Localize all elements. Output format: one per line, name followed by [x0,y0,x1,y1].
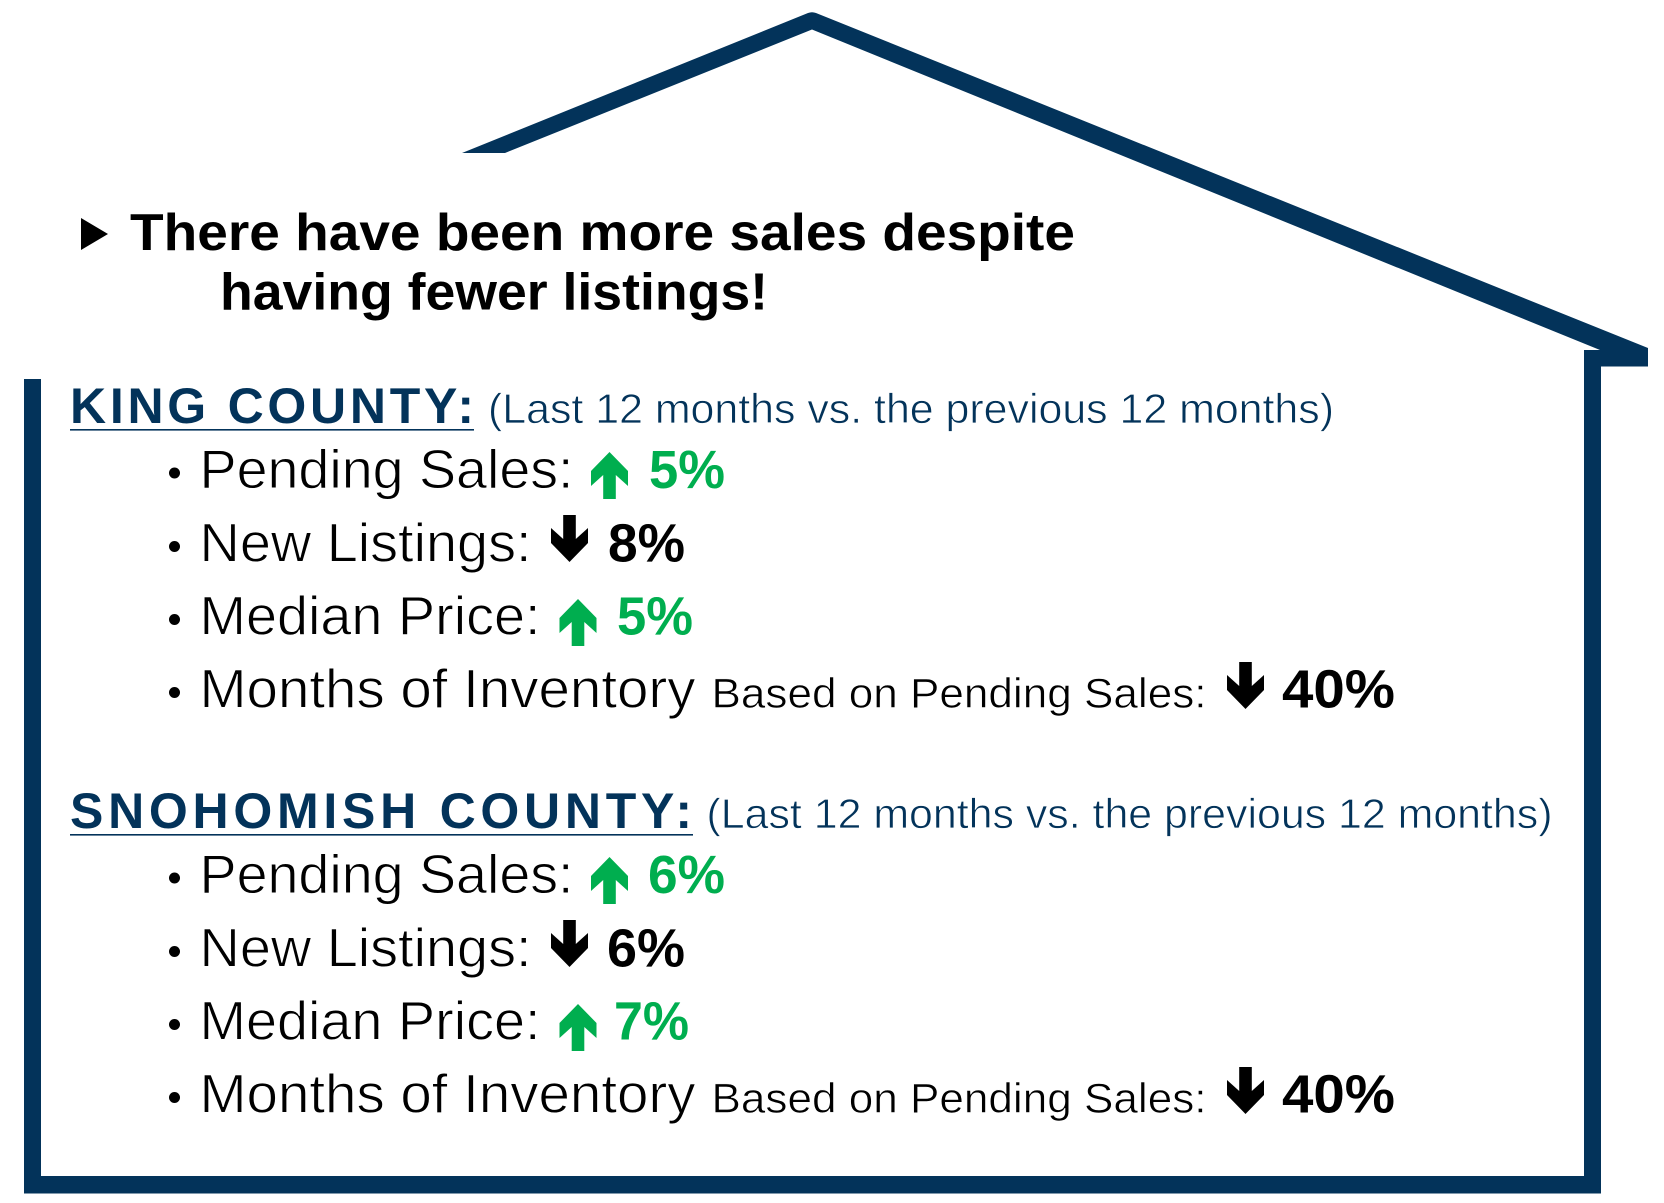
headline text: There have been more sales despite [130,204,1075,262]
icon: triangle bullet [81,218,108,250]
row: new listings: New Listings: [200,916,532,978]
King County period note: (Last 12 months vs. the previous 12 months) [488,385,1334,432]
walls [24,350,1601,1194]
row: months of inventory: 40% [1282,660,1395,720]
row: median price: Median Price: [200,990,540,1052]
row: median price: Median Price: [200,584,540,646]
row: median price [169,990,689,1052]
row: new listings [169,916,685,978]
row: pending sales: 6% [648,845,725,905]
panel: King County [70,378,1395,720]
row: pending sales [169,438,725,500]
panel: Snohomish County [70,783,1552,1124]
Snohomish County heading: SNOHOMISH COUNTY: [70,783,692,839]
row: months of inventory: Based on Pending Sales: [712,670,1206,716]
row: pending sales: Pending Sales: [200,843,574,905]
row: new listings: 8% [608,514,685,574]
row: months of inventory [169,658,1395,720]
row: new listings: 6% [607,918,685,978]
headline text [130,204,1075,322]
row: median price [169,584,693,646]
row: pending sales: 5% [649,440,725,500]
row: pending sales [169,843,725,905]
row: months of inventory [169,1062,1395,1124]
row: months of inventory: Months of Inventory [200,658,696,720]
row: months of inventory: 40% [1282,1064,1395,1124]
roof [462,12,1648,366]
row: months of inventory: Based on Pending Sales: [712,1074,1206,1122]
headline callout [81,204,1075,322]
row: median price: 7% [614,992,689,1052]
row: median price: 5% [617,586,693,646]
King County heading: KING COUNTY: [70,378,474,434]
row: new listings [169,512,685,574]
row: pending sales: Pending Sales: [200,438,574,500]
row: new listings: New Listings: [200,512,532,574]
Snohomish County period note: (Last 12 months vs. the previous 12 months) [706,790,1552,837]
headline text: having fewer listings! [220,264,768,322]
row: months of inventory: Months of Inventory [200,1062,696,1124]
